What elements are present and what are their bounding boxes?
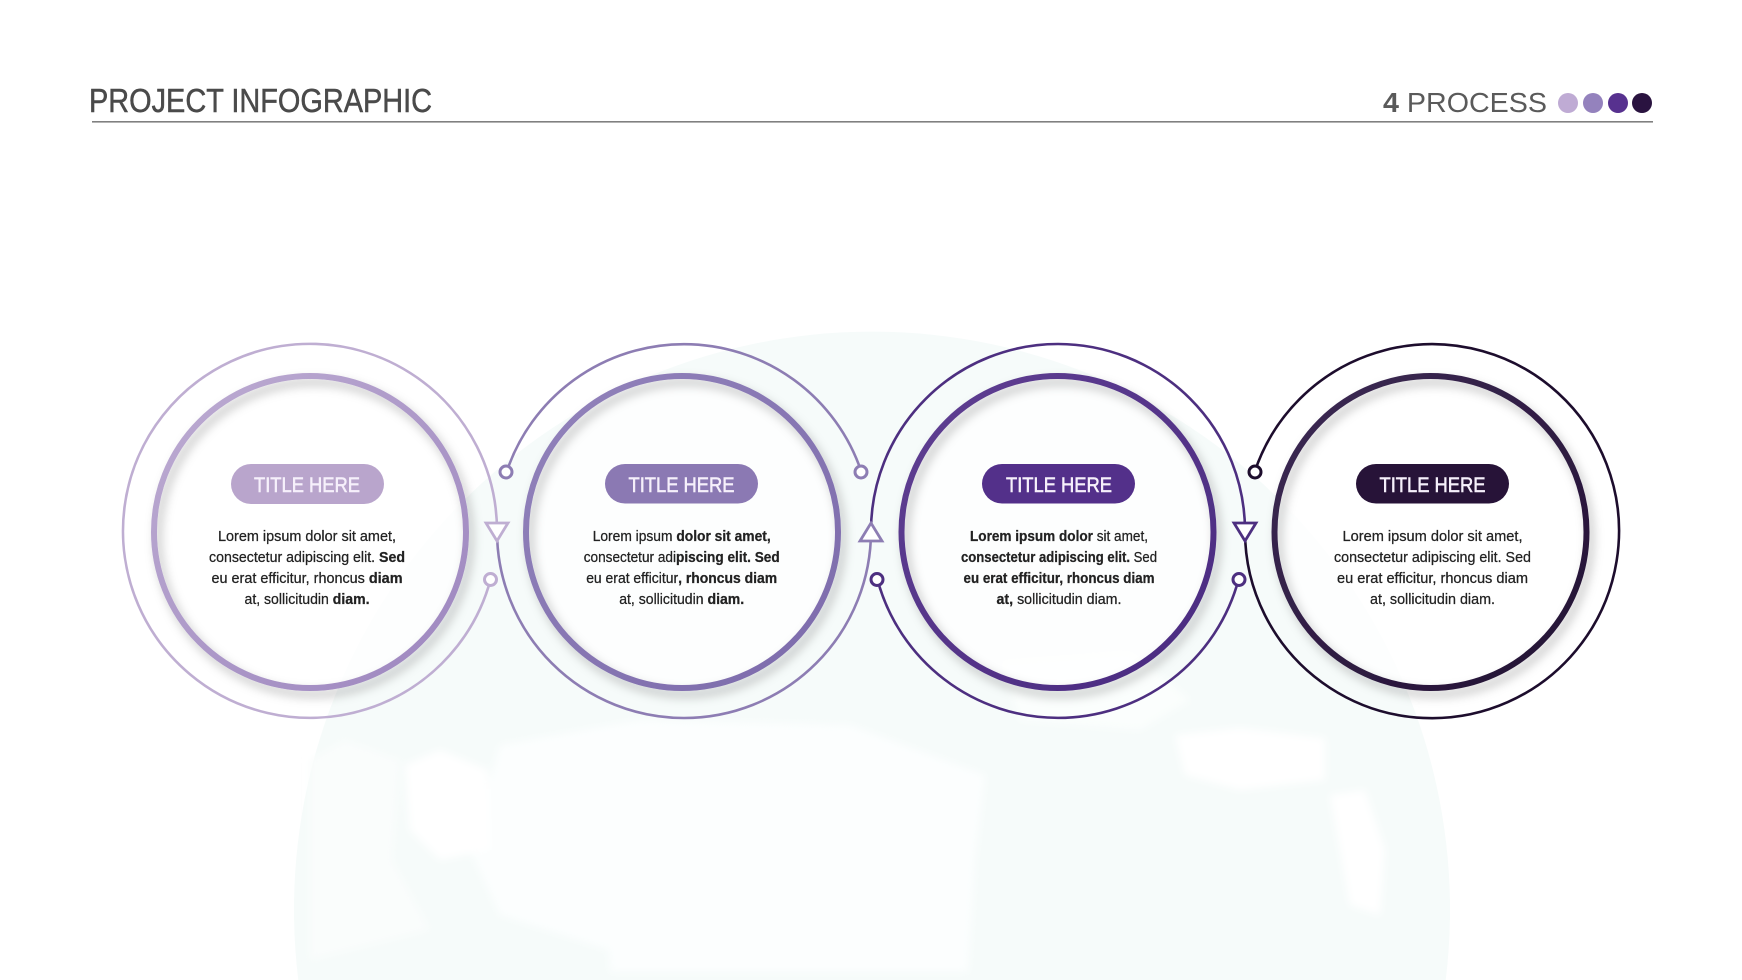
body text 4: Lorem ipsum dolor sit amet, bbox=[1342, 529, 1522, 545]
body text 4: at, sollicitudin diam. bbox=[1370, 592, 1495, 608]
body text 3: Lorem ipsum dolor sit amet, bbox=[970, 529, 1148, 545]
body text 4 bbox=[1334, 529, 1531, 608]
body text 3 bbox=[961, 529, 1157, 608]
title pill 3: TITLE HERE bbox=[1006, 474, 1112, 497]
inner disc 2 bbox=[526, 376, 838, 688]
background world globe watermark bbox=[294, 332, 1450, 980]
end dot 4 bbox=[1249, 466, 1261, 478]
body text 3: consectetur adipiscing elit. Sed bbox=[961, 550, 1157, 566]
inner ring 1 bbox=[154, 376, 466, 688]
arrow: step 1 to 2 bbox=[486, 523, 508, 541]
title pill 4: TITLE HERE bbox=[1380, 474, 1486, 497]
outer arcs 3 bbox=[871, 344, 1245, 718]
body text 3: eu erat efficitur, rhoncus diam bbox=[964, 571, 1154, 587]
body text 1: Lorem ipsum dolor sit amet, bbox=[218, 529, 396, 545]
title: PROJECT INFOGRAPHIC bbox=[89, 82, 432, 119]
step 2 bbox=[497, 344, 871, 718]
title pill 2 bbox=[605, 464, 758, 504]
inner disc 3 bbox=[902, 376, 1214, 688]
inner disc 1 bbox=[154, 376, 466, 688]
title pill 1: TITLE HERE bbox=[254, 474, 360, 497]
outer arc 1 bbox=[123, 344, 497, 718]
body text 2 bbox=[584, 529, 780, 608]
arrow: step 2 to 3 bbox=[860, 523, 882, 541]
inner ring 2 bbox=[526, 376, 838, 688]
body text 2: eu erat efficitur, rhoncus diam bbox=[586, 571, 777, 587]
outer arc 4 bbox=[1245, 344, 1619, 718]
process count label: 4 PROCESS bbox=[1383, 87, 1547, 118]
title pill 3 bbox=[982, 464, 1135, 504]
body text 1: eu erat efficitur, rhoncus diam bbox=[212, 571, 402, 587]
arrow: step 3 to 4 bbox=[1234, 523, 1256, 541]
step 4 bbox=[1245, 344, 1619, 718]
body text 1: consectetur adipiscing elit. Sed bbox=[209, 550, 405, 566]
end dots 3 bbox=[871, 574, 1245, 586]
end dots 2 bbox=[500, 466, 867, 478]
body text 2: consectetur adipiscing elit. Sed bbox=[584, 550, 780, 566]
inner ring 3 bbox=[902, 376, 1214, 688]
title pill 2: TITLE HERE bbox=[628, 474, 734, 497]
outer arcs 2 bbox=[497, 344, 871, 718]
body text 4: consectetur adipiscing elit. Sed bbox=[1334, 550, 1531, 566]
step 1 bbox=[123, 344, 497, 718]
body text 1 bbox=[209, 529, 405, 608]
title pill 4 bbox=[1356, 464, 1509, 504]
body text 2: at, sollicitudin diam. bbox=[619, 592, 744, 608]
body text 2: Lorem ipsum dolor sit amet, bbox=[593, 529, 771, 545]
step 3 bbox=[871, 344, 1245, 718]
legend dots bbox=[1558, 93, 1652, 113]
inner disc 4 bbox=[1274, 376, 1586, 688]
body text 3: at, sollicitudin diam. bbox=[996, 592, 1122, 608]
title pill 1 bbox=[231, 464, 384, 504]
header rule bbox=[92, 121, 1653, 123]
body text 4: eu erat efficitur, rhoncus diam bbox=[1337, 571, 1528, 587]
end dot 1 bbox=[484, 574, 496, 586]
body text 1: at, sollicitudin diam. bbox=[244, 592, 370, 608]
inner ring 4 bbox=[1274, 376, 1586, 688]
